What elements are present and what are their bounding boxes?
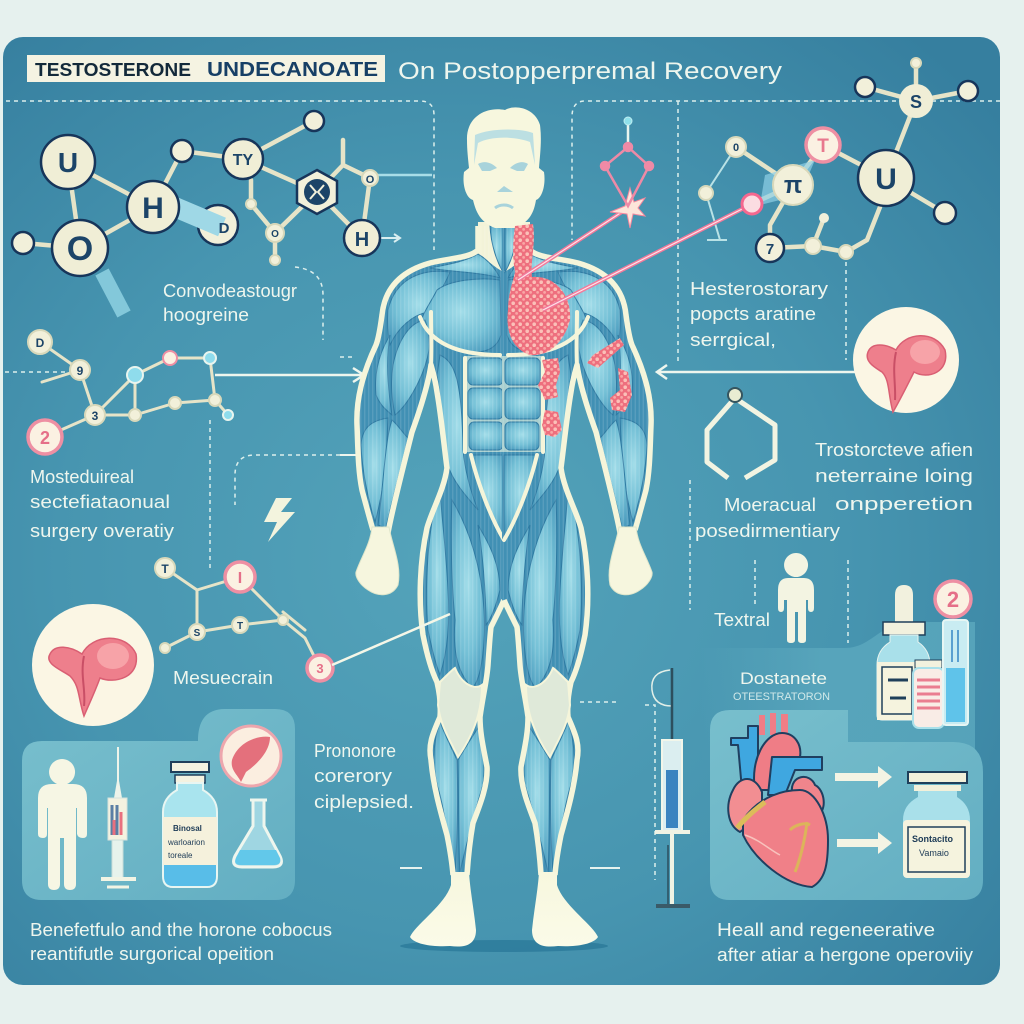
molecule: top left: O [67, 230, 93, 268]
icon: uterus circle right [853, 307, 959, 413]
text block: pronone: ciplepsied. [314, 792, 414, 812]
text block: molecular: posedirmentiary [695, 521, 840, 541]
title: UNDECANOATE [207, 59, 378, 81]
molecule: lower left: T [237, 621, 243, 632]
left half of body [356, 222, 506, 947]
silhouette outline [357, 226, 504, 875]
arrow: right to body [657, 365, 855, 379]
text block: pronone: Prononore [314, 741, 396, 761]
text block: right upper: popcts aratine [690, 304, 816, 324]
molecule: top right: 7 [766, 241, 774, 258]
muscle striations [357, 226, 506, 875]
icon: flask [234, 800, 281, 867]
molecule: top left: D [219, 220, 230, 237]
title: On Postopperpremal Recovery [398, 58, 782, 85]
line: lower molecule to thigh [332, 614, 450, 665]
molecule: top right [699, 58, 978, 262]
molecule: top right: U [875, 163, 897, 196]
laser: pink beams [518, 188, 762, 310]
icon: heart [728, 713, 828, 887]
icon: molecule ring middle right [707, 388, 775, 478]
panel: upper right backdrop [700, 622, 975, 760]
icon: person [38, 759, 87, 890]
panel: bottom left [22, 709, 295, 900]
icon: vial: Binosal [173, 824, 202, 833]
molecule: middle left: D [36, 336, 45, 350]
text block: mesuecrain: Mesuecrain [173, 668, 273, 688]
text block: pronone: corerory [314, 766, 392, 786]
text block: doctanete [733, 669, 830, 703]
text block: bottom right caption: Heall and regeneerative [717, 920, 935, 940]
text block: bottom left caption: reantifutle surgorical opeition [30, 944, 274, 964]
molecule: top left: U [58, 147, 78, 178]
text block: right middle: onpperetion [835, 494, 973, 514]
molecule: middle left [28, 330, 233, 454]
molecule: top left [12, 111, 432, 314]
calf outer [434, 722, 458, 870]
molecule: top left: H [355, 229, 369, 251]
icon: vial: warloarion [167, 838, 205, 847]
ab row 2 [468, 388, 503, 419]
hand [356, 527, 399, 595]
forearm outer [361, 418, 388, 522]
text block: bottom left caption: Benefetfulo and the horone cobocus [30, 920, 332, 940]
text block: bottom left caption [30, 920, 332, 964]
icon: bottles group [877, 581, 971, 728]
icon: person right [778, 553, 814, 643]
text block: left middle [30, 467, 174, 541]
text block: left middle: Mosteduireal [30, 467, 134, 487]
text block: right middle: Trostorcteve afien [815, 440, 973, 460]
text block: textal: Textral [714, 610, 770, 630]
icon: syringe center [652, 668, 690, 906]
text block: right upper: serrgical, [690, 330, 776, 350]
text block: left upper [163, 281, 297, 325]
arrow: heart to vial upper [835, 766, 892, 788]
icon: vial [163, 762, 217, 887]
molecule: top left: H [142, 192, 164, 225]
neck cream [478, 222, 504, 272]
icon: pink triangle molecule [601, 117, 653, 206]
triceps [376, 335, 392, 415]
icon: vial large: Vamaio [919, 848, 949, 858]
text block: molecular [695, 495, 840, 541]
molecule: lower left: T [161, 562, 169, 576]
title [27, 55, 782, 85]
molecule: lower left: S [194, 628, 201, 639]
lower abdomen [472, 455, 504, 537]
molecule: middle left: 3 [92, 409, 99, 423]
title: TESTOSTERONE [35, 60, 191, 80]
panel: bottom right [710, 710, 983, 900]
text block: bottom right caption: after atiar a hergone operoviiy [717, 945, 973, 965]
icon: bolt [264, 498, 295, 542]
pectoral muscle [422, 279, 501, 352]
foot shadow [400, 940, 608, 952]
molecule: top right: S [910, 92, 922, 112]
short dashes beside shins [400, 867, 620, 869]
molecule: top right: 0 [733, 142, 739, 154]
text block: right middle: neterraine loing [815, 466, 973, 486]
icon: bottles group: 2 [947, 587, 959, 612]
icon: syringe [101, 747, 136, 887]
arrow: left lower to arm [340, 449, 375, 461]
ab row 1 [468, 358, 503, 385]
silhouette fill [357, 226, 506, 875]
right half of body [502, 222, 652, 947]
text block: doctanete: OTEESTRATORON [733, 691, 830, 703]
molecule: top left: O [366, 174, 375, 186]
icon: vial: toreale [168, 851, 193, 860]
ab row 3 [469, 422, 503, 450]
quad main [451, 500, 484, 688]
knee [438, 668, 482, 757]
neck muscle [490, 226, 503, 272]
icon: vial large: Sontacito [912, 834, 954, 844]
icon: uterus circle left [32, 604, 154, 726]
trapezius [430, 254, 500, 278]
head [463, 107, 545, 228]
molecule: top right: T [817, 136, 829, 157]
tissue: inflamed chest [507, 224, 632, 437]
dashed connector lines [5, 101, 1000, 880]
abdominal backing [466, 356, 506, 452]
molecule: lower left: I [238, 570, 242, 587]
icon: organ circle [221, 726, 281, 786]
molecule: top right: π [784, 172, 802, 199]
text block: doctanete: Dostanete [740, 669, 827, 688]
deltoid [388, 271, 450, 345]
text block: pronone [314, 741, 414, 812]
molecule: top left: O [271, 229, 279, 240]
text block: right middle [815, 440, 973, 514]
molecule: lower left [155, 558, 333, 681]
text block: right upper: Hesterostorary [690, 279, 828, 299]
arrow: left to body [215, 368, 364, 382]
text block: right upper [690, 279, 828, 350]
oblique [437, 355, 478, 510]
text block: bottom right caption [717, 920, 973, 965]
forearm inner [378, 420, 408, 528]
molecule: middle left: 9 [77, 364, 84, 378]
chest and groin lines [420, 312, 504, 540]
text block: left upper: Convodeastougr [163, 281, 297, 301]
figure: human body [356, 107, 652, 947]
quad inner [478, 525, 500, 625]
molecule: lower left: 3 [316, 661, 324, 676]
text block: left upper: hoogreine [163, 305, 249, 325]
icon: vial large [903, 772, 970, 878]
arrow: heart to vial lower [837, 832, 892, 854]
molecule: middle left: 2 [40, 428, 50, 448]
quad outer [426, 490, 449, 675]
text block: left middle: sectefiataonual [30, 492, 170, 512]
calf inner [458, 728, 484, 872]
molecule: top left: TY [233, 152, 254, 169]
text block: left middle: surgery overatiy [30, 521, 174, 541]
foot [410, 872, 476, 947]
biceps [392, 320, 429, 415]
text block: molecular: Moeracual [724, 495, 816, 515]
